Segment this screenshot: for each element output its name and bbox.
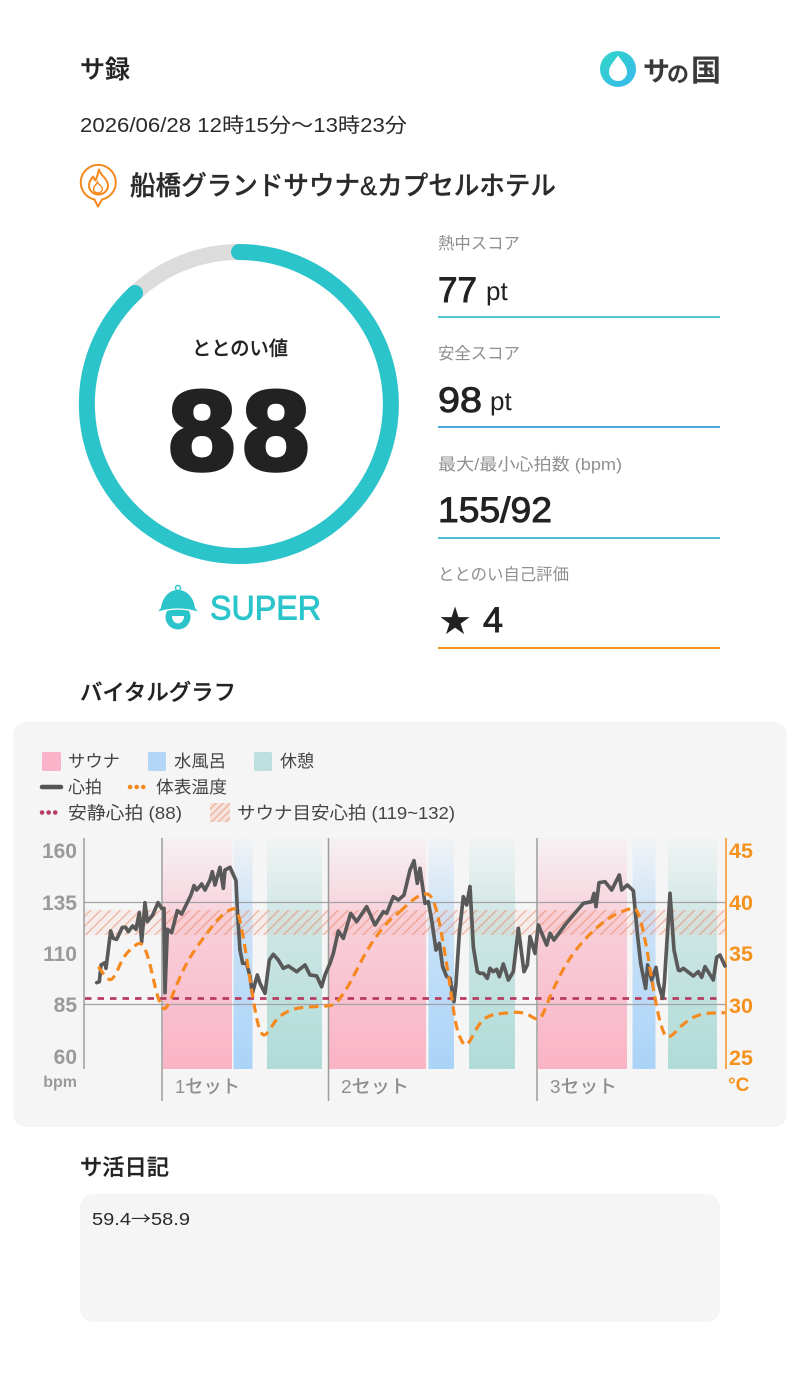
left axis labels [42,840,77,1091]
legend: 休憩 [280,751,314,771]
set labels [175,1076,617,1097]
rank: SUPER [158,586,321,630]
stat: 安全スコア: pt [490,386,512,416]
legend: 安静心拍 (88) [68,803,182,823]
logo wordmark: サ [643,57,670,87]
legend: 水風呂 [174,751,226,771]
logo: サの国 [600,51,721,88]
legend: サウナ [68,751,120,771]
logo wordmark: の [667,62,689,87]
set labels: 1セット [175,1076,240,1097]
session date: 2026/06/28 12時15分〜13時23分 [80,114,407,137]
rank label: SUPER [210,590,321,628]
stat: 最大/最小心拍数: 最大/最小心拍数 (bpm) [438,456,622,474]
heart rate line [97,861,725,1002]
diary box: 59.4 →58.9 [92,1206,190,1231]
stat: ととのい自己評価: 4 [483,600,503,640]
stat: 熱中スコア: pt [486,276,508,306]
legend [42,751,455,823]
legend: サウナ目安心拍 (119~132) [237,803,455,823]
stat: 安全スコア [438,345,720,428]
stat: 熱中スコア: 熱中スコア [438,235,520,253]
legend: 心拍 [68,777,102,797]
left axis labels: 85 [54,994,77,1017]
icon: mascot with sauna hat [158,586,198,630]
right axis labels [728,839,753,1096]
stat: 熱中スコア: 77 [438,270,477,310]
gauge value: 88 [165,371,313,496]
resting heart rate line [85,997,720,1000]
left axis labels: 110 [43,943,77,966]
stat: ととのい自己評価: ととのい自己評価 [438,566,569,584]
set labels: 3セット [550,1076,617,1097]
stat: 最大/最小心拍数: 155/92 [438,490,552,530]
gauge label: ととのい値 [192,338,288,360]
right axis labels: 45 [729,839,753,863]
phase bands [163,838,717,1069]
left axis labels: 135 [42,892,77,915]
panel: vital graph [13,722,787,1127]
skin temperature line [98,894,725,1045]
left axis labels: bpm [43,1074,77,1091]
title: サ録 [80,56,130,84]
icon: facility flame pin [81,165,116,206]
target heart rate band [84,910,726,935]
legend: 体表温度 [156,777,227,797]
stat: 安全スコア: 98 [438,380,482,420]
heading: サ活日記: サ活日記 [80,1155,169,1180]
left axis labels: 60 [54,1046,77,1069]
stat: ととのい自己評価: ★ [438,599,472,643]
right axis labels: 25 [729,1046,753,1070]
right axis labels: °C [728,1075,750,1096]
gauge: ととのい値 [87,252,391,556]
left axis labels: 160 [42,840,77,863]
heading: バイタルグラフ: バイタルグラフ [80,680,236,705]
right axis labels: 40 [729,891,753,915]
right axis labels: 30 [729,994,753,1018]
stat: 熱中スコア [438,235,720,318]
stat: 安全スコア: 安全スコア [438,345,520,363]
stat: ととのい自己評価 [438,566,720,649]
stat: 最大/最小心拍数 [438,456,720,539]
facility name: 船橋グランドサウナ&カプセルホテル [130,171,556,201]
set labels: 2セット [341,1076,409,1097]
diary box [80,1194,720,1322]
icon: water drop [600,51,636,87]
logo wordmark [643,55,721,88]
right axis labels: 35 [729,942,753,966]
logo wordmark: 国 [691,55,721,88]
chart: heart rate and skin temperature [42,838,753,1101]
